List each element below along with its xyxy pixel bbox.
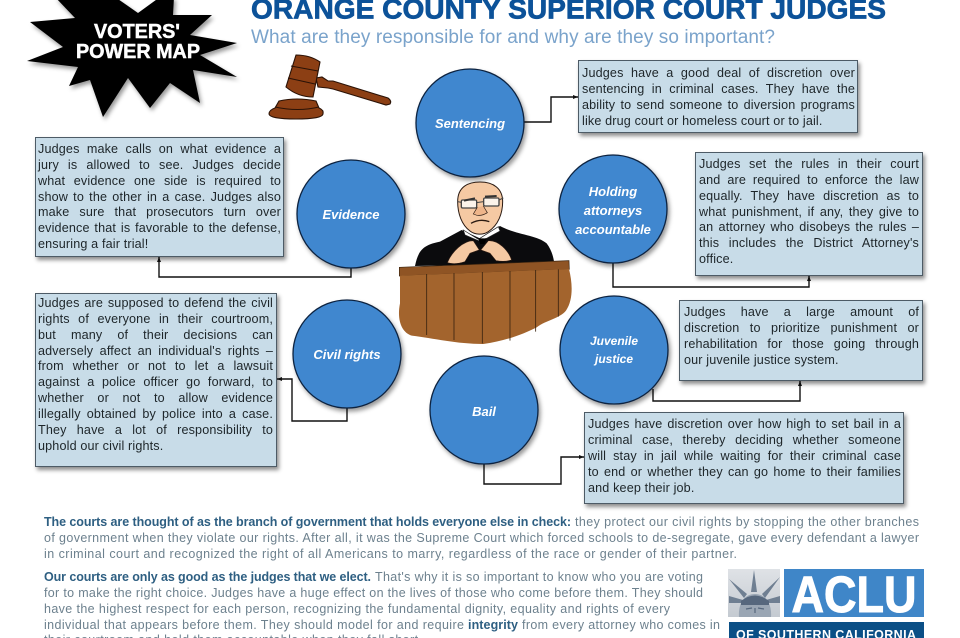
text box: Holding attorneys accountable: equally. They have discretion as to <box>699 189 919 203</box>
text box: Juvenile justice: Judges have a large amount of <box>684 305 919 319</box>
circle: Holding attorneys accountable: accountable <box>575 222 651 237</box>
text box: Sentencing: like drug court or homeless court or to jail. <box>582 114 823 128</box>
text box: Bail <box>584 412 904 504</box>
circle: Holding attorneys accountable <box>559 155 667 263</box>
text box: Evidence: Judges make calls on what evidence a <box>38 142 281 156</box>
text box: Juvenile justice: rehabilitation for those going through <box>684 337 919 351</box>
text box: Civil rights <box>35 293 277 467</box>
text box: Holding attorneys accountable: this includes the District Attorney's <box>699 236 919 250</box>
circle: Juvenile justice <box>560 296 668 404</box>
paragraph: courts are only as good as the judges we elect <box>44 570 720 638</box>
circle: Civil rights <box>293 300 401 408</box>
circle: Evidence <box>297 160 405 268</box>
text box: Evidence: what evidence one side is required to <box>38 174 281 188</box>
text box: Sentencing <box>578 60 858 133</box>
paragraph: courts are only as good as the judges we elect: individual that appears before them. They should model for and require <box>44 618 464 632</box>
paragraph: courts are only as good as the judges we elect: have the highest respect for each person, recognizing the fundamental dignity, equality and rights of every <box>44 602 671 616</box>
text box: Sentencing: sentencing in criminal cases. They have the <box>582 82 855 96</box>
paragraph: courts as a check on government: The courts are thought of as the branch of government that holds everyone else in check: <box>44 515 571 529</box>
connector: Bail to text box <box>484 457 584 484</box>
text box: Juvenile justice <box>679 300 923 381</box>
text box: Civil rights: They have a lot of responsibility to <box>38 423 273 437</box>
text box: Civil rights: illegally obtained by police into a case. <box>38 407 273 421</box>
circle: Evidence: Evidence <box>322 207 380 222</box>
circle: Bail: Bail <box>472 404 496 419</box>
text box: Evidence: make sure that prosecutors turn over <box>38 205 281 219</box>
paragraph: courts as a check on government: of government when they violate our rights. After all, it was the Supreme Court which forced schools to de-segregate, gave every defendant a lawyer <box>44 531 919 545</box>
text box: Sentencing: ability to send someone to diversion programs <box>582 98 855 112</box>
subtitle: What are they responsible for and why are they so important? <box>251 27 775 48</box>
text box: Bail: will stay in jail while waiting for their criminal case <box>588 449 901 463</box>
paragraph: courts are only as good as the judges we elect: for to make the right choice. Judges have a huge effect on the lives of those who come before them. They should <box>44 586 703 600</box>
logo: ACLU of Southern California: ACLU <box>792 566 916 623</box>
text box: Civil rights: Judges are supposed to defend the civil <box>38 296 273 310</box>
connector: Juvenile justice to text box <box>653 381 800 401</box>
text box: Civil rights: from whether or not to let a lawsuit <box>38 359 273 373</box>
paragraph: courts as a check on government: they protect our civil rights by stopping the other branches <box>575 515 919 529</box>
text box: Civil rights: uphold our civil rights. <box>38 439 163 453</box>
text box: Civil rights: against a police officer go forward, to <box>38 375 273 389</box>
text box: Civil rights: adversely affect an individual's rights – <box>38 344 273 358</box>
paragraph: courts are only as good as the judges we elect: from every attorney who comes in <box>522 618 720 632</box>
text box: Bail: criminal case, thereby deciding whether someone <box>588 433 901 447</box>
connector: Evidence to text box <box>159 257 351 277</box>
circle: Bail <box>430 356 538 464</box>
text box: Juvenile justice: our juvenile justice system. <box>684 353 839 367</box>
text box: Evidence <box>35 137 284 257</box>
circle: Juvenile justice: justice <box>593 352 633 366</box>
text box: Holding attorneys accountable: Judges set the rules in their court <box>699 157 919 171</box>
circle: Holding attorneys accountable: Holding <box>589 184 637 199</box>
text box: Holding attorneys accountable <box>695 152 923 276</box>
starburst badge: Voters' Power Map: VOTERS' <box>94 21 180 43</box>
connector: Civil rights to text box <box>277 379 347 421</box>
text box: Evidence: jury is allowed to see. Judges decide <box>38 158 281 172</box>
text box: Sentencing: Judges have a good deal of discretion over <box>582 66 855 80</box>
starburst badge: Voters' Power Map: POWER MAP <box>76 41 200 63</box>
text box: Bail: Judges have discretion over how high to set bail in a <box>588 417 901 431</box>
text box: Civil rights: whether or not to allow evidence <box>38 391 273 405</box>
text box: Civil rights: rights of everyone in their courtroom, <box>38 312 273 326</box>
circle: Holding attorneys accountable: attorneys <box>584 203 642 218</box>
connector: Sentencing to text box <box>524 97 578 122</box>
connector: Holding attorneys accountable to text box <box>613 263 809 287</box>
circle: Juvenile justice: Juvenile <box>590 334 638 348</box>
circle: Sentencing <box>416 69 524 177</box>
paragraph: courts are only as good as the judges we elect: That's why it is so important to know who you are voting <box>375 570 703 584</box>
paragraph: courts are only as good as the judges we elect: Our courts are only as good as the judges that we elect. <box>44 570 371 584</box>
circle: Civil rights: Civil rights <box>313 347 381 362</box>
illustration: judge behind bench <box>399 182 572 344</box>
text box: Bail: and keep their job. <box>588 481 694 495</box>
text box: Holding attorneys accountable: what punishment, if any, they give to <box>699 205 919 219</box>
circle: Sentencing: Sentencing <box>435 116 505 131</box>
paragraph: courts as a check on government <box>44 515 919 561</box>
paragraph: courts are only as good as the judges we elect: integrity <box>468 618 518 632</box>
text box: Evidence: ensuring a fair trial! <box>38 237 148 251</box>
icon: gavel and sound block <box>269 55 391 119</box>
text box: Juvenile justice: discretion to prioritize punishment or <box>684 321 919 335</box>
logo: ACLU of Southern California <box>728 566 924 638</box>
text box: Civil rights: but many of their decisions can <box>38 328 273 342</box>
paragraph: courts as a check on government: in criminal court and recognized the right of all Americans to marry, regardless of the race or gender of their partner. <box>44 547 737 561</box>
text box: Evidence: evidence that is favorable to the defense, <box>38 221 281 235</box>
text box: Bail: to end or whether they can go home to their families <box>588 465 901 479</box>
text box: Holding attorneys accountable: office. <box>699 252 733 266</box>
text box: Holding attorneys accountable: and are required to enforce the law <box>699 173 919 187</box>
text box: Holding attorneys accountable: an attorney who disobeys the rules – <box>699 220 919 234</box>
starburst badge: Voters' Power Map <box>27 0 237 117</box>
text box: Evidence: show to the other in a case. Judges also <box>38 190 281 204</box>
